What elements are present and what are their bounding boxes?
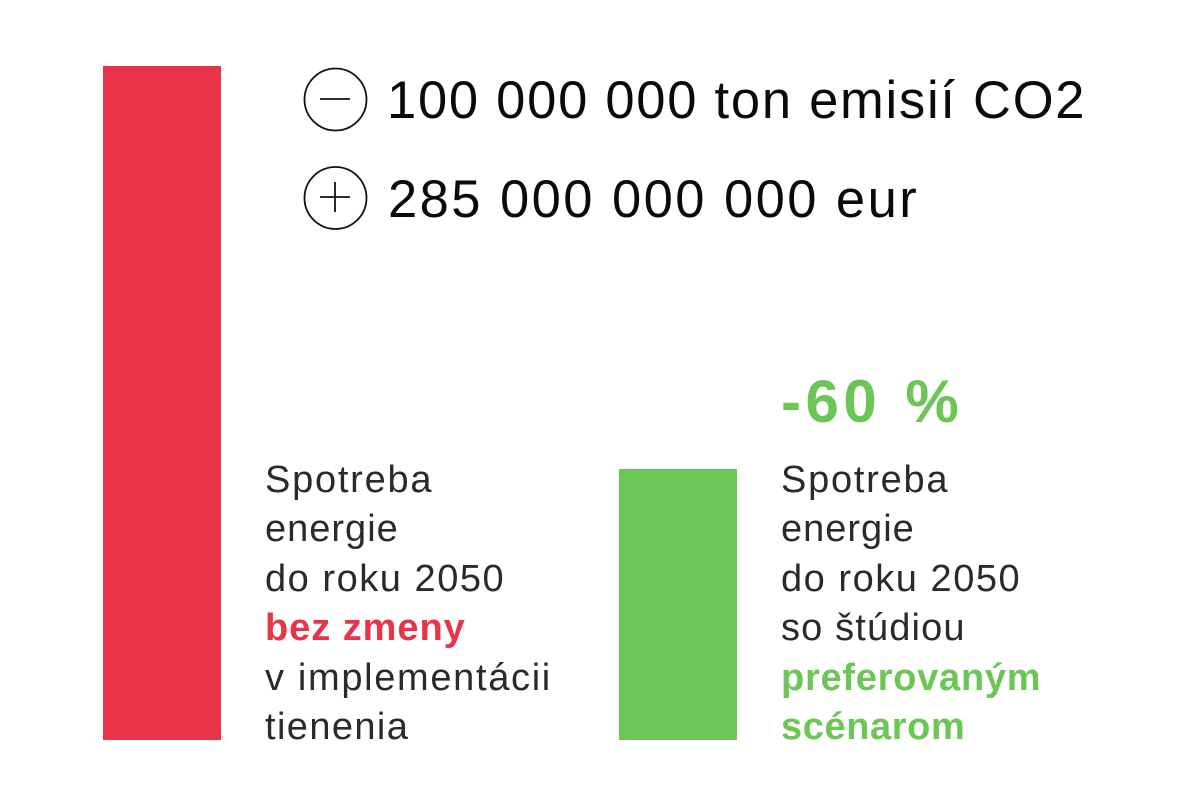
- text: preferred scenario: do roku 2050: [781, 558, 1021, 600]
- text: preferred scenario: preferovaným: [781, 657, 1041, 699]
- text: preferred scenario: Spotreba: [781, 459, 949, 501]
- red bar: [103, 66, 221, 740]
- text: scenario without change: energie: [265, 508, 399, 550]
- text: scenario without change: v implementácii: [265, 657, 552, 699]
- text: scenario without change: [265, 459, 552, 748]
- text: scenario without change: do roku 2050: [265, 558, 505, 600]
- text: scenario without change: Spotreba: [265, 459, 433, 501]
- text: scenario without change: bez zmeny: [265, 607, 466, 649]
- text: scenario without change: tienenia: [265, 706, 409, 748]
- text: preferred scenario: energie: [781, 508, 915, 550]
- text: preferred scenario: [781, 459, 1041, 748]
- text: preferred scenario: so štúdiou: [781, 607, 966, 649]
- icon: minus in circle: [304, 68, 368, 132]
- icon: plus in circle: [304, 166, 368, 230]
- text: preferred scenario: scénarom: [781, 706, 965, 748]
- percentage reduction: -60 %: [781, 368, 963, 435]
- green bar: [619, 469, 737, 740]
- emissions figure: 100 000 000 ton emisií CO2: [387, 71, 1086, 130]
- euro figure: 285 000 000 000 eur: [388, 170, 919, 229]
